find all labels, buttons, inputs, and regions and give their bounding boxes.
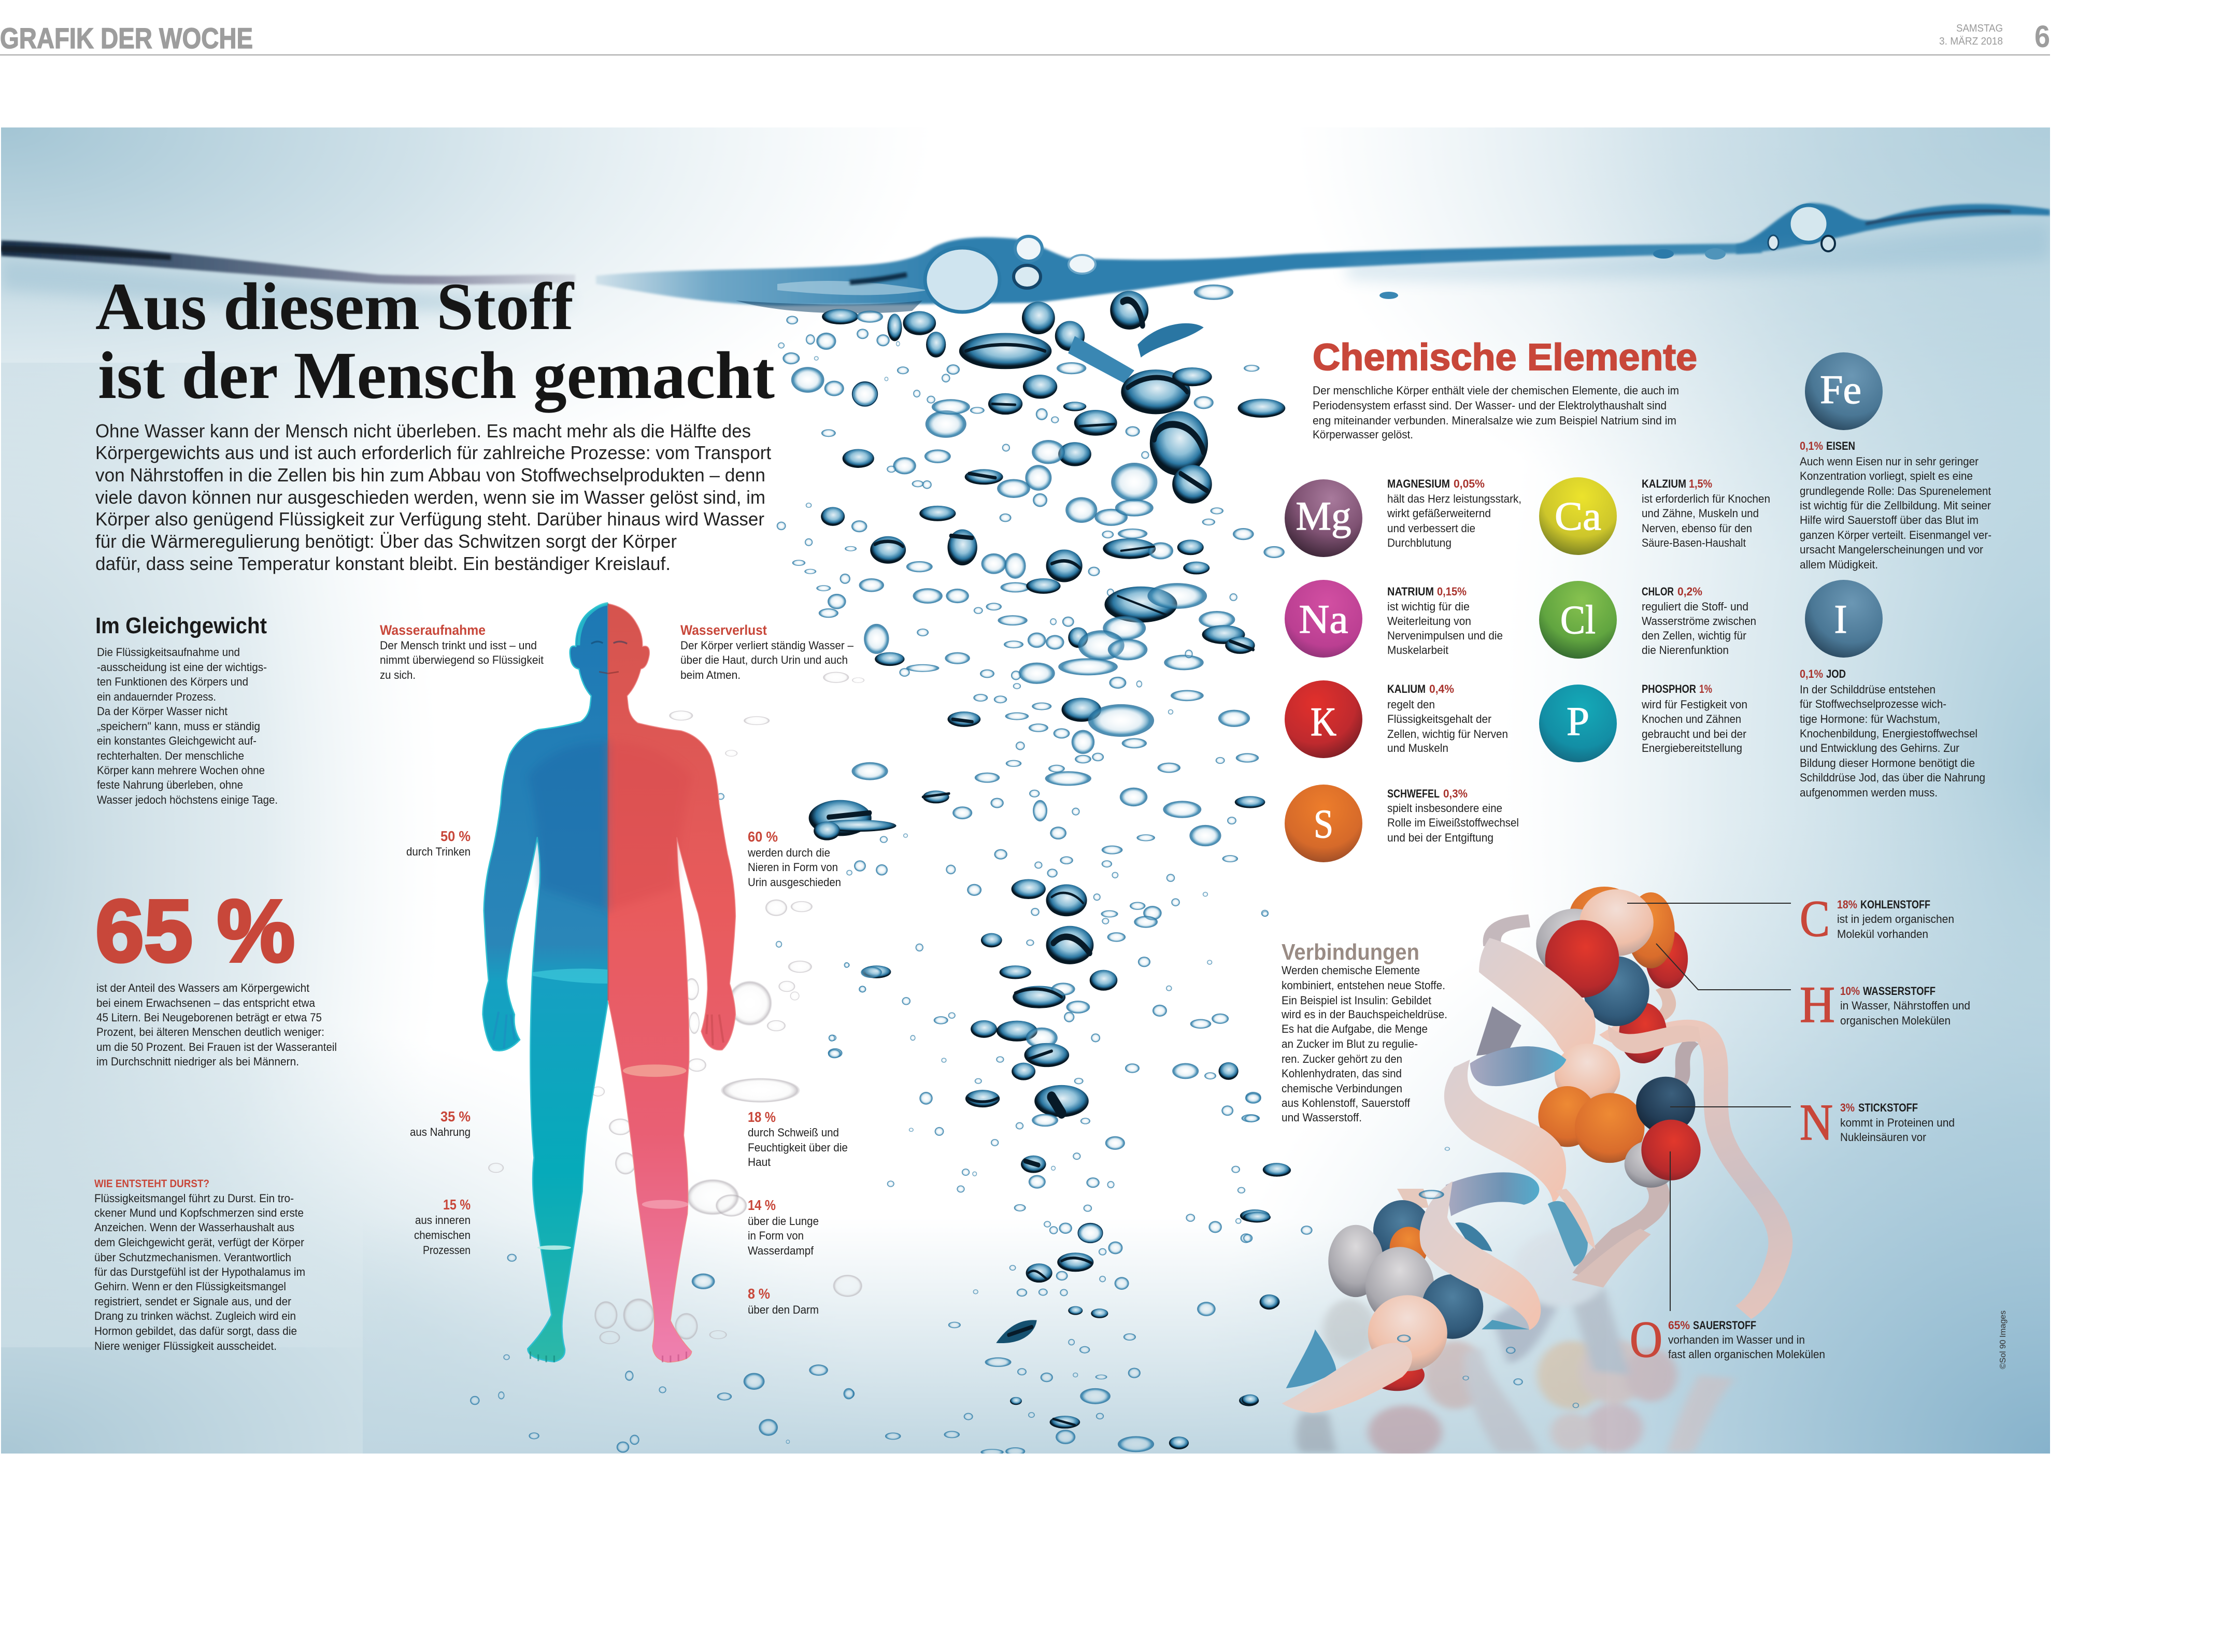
18 percent: Haut (748, 1156, 771, 1169)
element: jod: JOD (1826, 667, 1846, 680)
element: chlor (1539, 581, 1756, 659)
panel: 65 percent (95, 882, 337, 1068)
element: schwefel: SCHWEFEL (1387, 787, 1440, 800)
intro text: viele davon können nur ausgeschieden werden, wenn sie im Wasser gelöst sind, im (95, 487, 765, 508)
intro text: von Nährstoffen in die Zellen bis hin zum Abbau von Stoffwechselprodukten – denn (95, 464, 765, 486)
8 percent: 8 % (748, 1286, 770, 1302)
atom label: O: SAUERSTOFF (1693, 1319, 1756, 1332)
element: kalium: regelt den (1387, 698, 1435, 711)
element: jod: und Entwicklung des Gehirns. Zur (1800, 742, 1959, 754)
page number: 6 (2034, 19, 2050, 54)
element: natrium: Muskelarbeit (1387, 644, 1448, 657)
panel: Wie entsteht Durst (94, 1178, 305, 1352)
helix blue inner surface (1470, 1046, 1566, 1086)
panel: Wasseraufnahme (380, 622, 544, 681)
body text: registriert, sendet er Signale aus, und der (94, 1295, 291, 1308)
body shading (493, 604, 723, 1362)
page header (0, 19, 2050, 55)
body text (1281, 964, 1447, 1124)
element: magnesium: wirkt gefäßerweiternd (1387, 507, 1491, 520)
body text: aus Kohlenstoff, Sauerstoff (1282, 1096, 1411, 1109)
element: kalzium: und Zähne, Muskeln und (1642, 507, 1759, 520)
element: kalium: und Muskeln (1387, 742, 1448, 754)
title: Aus diesem Stoff (95, 269, 575, 344)
icon: P sphere: P (1567, 699, 1589, 744)
atom label: N: STICKSTOFF (1858, 1101, 1918, 1114)
panel: Wasseraufnahme: nimmt überwiegend so Flüssigkeit (380, 653, 544, 666)
intro text: Körpergewichts aus und ist auch erforderlich für zahlreiche Prozesse: vom Transport (95, 442, 771, 463)
element: natrium: ist wichtig für die (1387, 600, 1470, 613)
description: im Durchschnitt niedriger als bei Männern. (96, 1055, 299, 1068)
human body figure (483, 604, 735, 1362)
atom label: N: 3% (1840, 1101, 1855, 1114)
15 percent: chemischen (414, 1229, 471, 1242)
body text: ten Funktionen des Körpers und (97, 675, 248, 688)
body text: Niere weniger Flüssigkeit ausscheidet. (94, 1340, 277, 1352)
icon: Na sphere: Na (1299, 596, 1348, 642)
atom label: C: KOHLENSTOFF (1860, 898, 1930, 911)
body text: feste Nahrung überleben, ohne (97, 778, 243, 791)
element: jod: aufgenommen werden muss. (1800, 786, 1938, 799)
element: magnesium (1285, 477, 1521, 557)
60 percent: Nieren in Form von (748, 861, 838, 874)
header date: 3. MÄRZ 2018 (1939, 36, 2003, 47)
atom label: H: organischen Molekülen (1840, 1014, 1951, 1027)
element: eisen: EISEN (1826, 439, 1855, 452)
35 percent: aus Nahrung (410, 1126, 471, 1138)
intake labels (406, 828, 471, 1257)
element: jod: tige Hormone: für Wachstum, (1800, 713, 1940, 725)
icon: S sphere (1285, 785, 1362, 862)
14 percent: über die Lunge (748, 1215, 819, 1228)
element: phosphor: 1% (1699, 682, 1712, 695)
panel: Chemische Elemente heading (1313, 337, 1697, 441)
heading: WIE ENTSTEHT DURST? (94, 1178, 209, 1190)
14 percent: Wasserdampf (748, 1244, 814, 1257)
element: eisen: allem Müdigkeit. (1800, 558, 1878, 571)
atom label: O: vorhanden im Wasser und in (1668, 1333, 1805, 1346)
icon: K sphere (1285, 680, 1362, 758)
atom label: H: H (1800, 976, 1835, 1033)
element: natrium: 0,15% (1437, 585, 1467, 598)
element: jod: Knochenbildung, Energiestoffwechsel (1800, 727, 1977, 740)
small bubbles over protein (1242, 910, 1579, 1408)
element: kalium: Flüssigkeitsgehalt der (1387, 713, 1491, 725)
element: kalzium: Nerven, ebenso für den (1642, 522, 1752, 535)
blue half: water intake (483, 604, 608, 1362)
60 percent: Urin ausgeschieden (748, 876, 841, 889)
element: kalium: KALIUM (1387, 682, 1426, 695)
body text: kombiniert, entstehen neue Stoffe. (1282, 979, 1445, 992)
element: eisen: grundlegende Rolle: Das Spurenelement (1800, 485, 1991, 497)
element: phosphor: Energiebereitstellung (1642, 742, 1742, 754)
body text: rechterhalten. Der menschliche (97, 749, 244, 762)
intro: Körperwasser gelöst. (1313, 428, 1413, 441)
body text: Kohlenhydraten, das sind (1282, 1067, 1402, 1080)
body text (97, 646, 278, 806)
icon: Ca sphere (1539, 477, 1617, 555)
big number: 65 % (95, 882, 295, 980)
atom label: C: Molekül vorhanden (1837, 928, 1928, 941)
element: phosphor (1539, 682, 1747, 762)
element: phosphor: gebraucht und bei der (1642, 728, 1746, 740)
upper helix back band (1476, 1006, 1521, 1056)
atom label: N: Nukleinsäuren vor (1840, 1131, 1926, 1144)
panel: Wasseraufnahme: zu sich. (380, 668, 416, 681)
body text: wird es in der Bauchspeicheldrüse. (1281, 1008, 1447, 1021)
body text: Ein Beispiel ist Insulin: Gebildet (1282, 994, 1431, 1007)
water surface (1, 203, 2050, 314)
body text: Anzeichen. Wenn der Wasserhaushalt aus (94, 1221, 294, 1234)
body text: -ausscheidung ist eine der wichtigs- (97, 661, 267, 674)
atom label: O (1630, 1311, 1825, 1368)
panel: Verbindungen (1281, 939, 1447, 1124)
element: phosphor: wird für Festigkeit von (1641, 698, 1747, 711)
body text: Körper kann mehrere Wochen ohne (97, 764, 265, 777)
element: phosphor: PHOSPHOR (1642, 682, 1696, 695)
heading: Im Gleichgewicht (95, 613, 267, 638)
body text (94, 1192, 305, 1352)
15 percent: aus inneren (415, 1214, 471, 1227)
body text: an Zucker im Blut zu regulie- (1282, 1037, 1418, 1050)
element: eisen: Hilfe wird Sauerstoff über das Blut im (1800, 514, 1979, 526)
atom label: N: N (1800, 1093, 1833, 1151)
atom label: N: kommt in Proteinen und (1840, 1116, 1955, 1129)
intro: Periodensystem erfasst sind. Der Wasser- und der Elektrolythaushalt sind (1313, 399, 1667, 412)
panel: Wasserverlust: Der Körper verliert ständig Wasser – (680, 639, 853, 652)
element: natrium: Nervenimpulsen und die (1387, 629, 1503, 642)
intro text: Körper also genügend Flüssigkeit zur Verfügung steht. Darüber hinaus wird Wasser (95, 508, 764, 530)
body text: Wasser jedoch höchstens einige Tage. (97, 793, 278, 806)
18 percent: durch Schweiß und (748, 1126, 839, 1139)
panel: Wasserverlust: Wasserverlust (680, 622, 767, 638)
icon: Fe sphere: Fe (1820, 367, 1861, 412)
element: eisen: Auch wenn Eisen nur in sehr geringer (1800, 455, 1979, 468)
atom label: H: in Wasser, Nährstoffen und (1840, 999, 1970, 1012)
element: chlor: den Zellen, wichtig für (1642, 629, 1746, 642)
element: chlor: CHLOR (1642, 585, 1674, 598)
intro text (95, 420, 771, 574)
panel: Wasseraufnahme: Der Mensch trinkt und isst – und (380, 639, 537, 652)
atom label: O: fast allen organischen Molekülen (1668, 1348, 1825, 1361)
14 percent: 14 % (748, 1197, 776, 1213)
atom label: H: 10% (1840, 985, 1860, 998)
lower atoms (1328, 1200, 1483, 1391)
icon: Mg sphere (1285, 479, 1362, 557)
body text: Drang zu trinken wächst. Zugleich wird ein (94, 1309, 296, 1322)
header day: SAMSTAG (1956, 23, 2003, 34)
60 percent (747, 829, 841, 889)
element: eisen: ist wichtig für die Zellbildung. Mit seiner (1800, 499, 1991, 512)
body text: Flüssigkeitsmangel führt zu Durst. Ein tro- (94, 1192, 294, 1205)
element: kalzium: Säure-Basen-Haushalt (1642, 536, 1746, 549)
body text: Da der Körper Wasser nicht (97, 705, 228, 718)
body text: und Wasserstoff. (1282, 1111, 1362, 1124)
body text: Gehirn. Wenn er den Flüssigkeitsmangel (94, 1280, 286, 1293)
icon: P sphere (1539, 685, 1617, 762)
60 percent: 60 % (748, 829, 778, 845)
body text: ckener Mund und Kopfschmerzen sind erste (94, 1206, 304, 1219)
element: schwefel: und bei der Entgiftung (1387, 831, 1493, 844)
body text: ein andauernder Prozess. (97, 690, 216, 703)
element: schwefel: Rolle im Eiweißstoffwechsel (1387, 816, 1519, 829)
35 percent (410, 1108, 471, 1138)
loss labels (747, 829, 848, 1316)
header title: GRAFIK DER WOCHE (0, 22, 253, 54)
element: kalium (1285, 680, 1508, 758)
panel: background image (1, 127, 2050, 1459)
lower helix (1446, 1172, 1539, 1216)
element: kalium: 0,4% (1429, 682, 1454, 695)
heading: Verbindungen (1282, 939, 1419, 965)
element: natrium: NATRIUM (1387, 585, 1434, 598)
leader lines (1627, 903, 1791, 1311)
atom label: H (1800, 976, 1970, 1033)
panel: Wasserverlust: über die Haut, durch Urin und auch (680, 653, 848, 666)
element: schwefel: spielt insbesondere eine (1387, 802, 1502, 815)
description: Prozent, bei älteren Menschen deutlich weniger: (96, 1026, 324, 1038)
icon: Mg sphere: Mg (1296, 493, 1351, 538)
helix front band A (1479, 938, 1596, 1071)
50 percent (406, 828, 471, 858)
intro (1313, 384, 1679, 441)
bubbles: lower cluster (786, 846, 1291, 1455)
element: phosphor: Knochen und Zähnen (1642, 713, 1741, 725)
body text: über Schutzmechanismen. Verantwortlich (94, 1251, 291, 1264)
element: chlor: die Nierenfunktion (1642, 644, 1729, 657)
35 percent: 35 % (440, 1108, 471, 1124)
middle atoms (1538, 1077, 1701, 1188)
body text: Hormon gebildet, das dafür sorgt, dass die (94, 1325, 297, 1337)
element: magnesium: 0,05% (1454, 477, 1485, 490)
body text: Die Flüssigkeitsaufnahme und (97, 646, 240, 659)
description (96, 981, 337, 1068)
element: schwefel (1285, 785, 1519, 862)
element: kalzium: 1,5% (1689, 477, 1712, 490)
60 percent: werden durch die (747, 846, 830, 859)
body text: ein konstantes Gleichgewicht auf- (97, 734, 257, 747)
element: eisen: Konzentration vorliegt, spielt es eine (1800, 469, 1973, 482)
body text: „speichern" kann, muss er ständig (97, 720, 260, 733)
element: kalzium: KALZIUM (1642, 477, 1686, 490)
tail strand (1609, 1029, 1781, 1312)
element: magnesium: hält das Herz leistungsstark, (1387, 492, 1521, 505)
body text: für das Durstgefühl ist der Hypothalamus im (94, 1265, 305, 1278)
element: chlor: reguliert die Stoff- und (1642, 600, 1748, 613)
15 percent (414, 1197, 471, 1257)
icon: K sphere: K (1311, 699, 1336, 744)
atom label: N (1800, 1093, 1955, 1151)
panel: Wasseraufnahme: Wasseraufnahme (380, 622, 486, 638)
atom label: O: O (1630, 1311, 1662, 1368)
14 percent (748, 1197, 819, 1257)
icon: S sphere: S (1314, 801, 1333, 846)
50 percent: 50 % (440, 828, 471, 844)
element: kalzium (1539, 477, 1770, 555)
atom label: C: ist in jedem organischen (1837, 913, 1954, 925)
element: jod: 0,1% (1800, 667, 1823, 680)
top atom cluster: back spheres (1536, 887, 1688, 1063)
body text: dem Gleichgewicht gerät, verfügt der Körper (94, 1236, 304, 1249)
icon: Ca sphere: Ca (1555, 493, 1601, 538)
element: kalzium: ist erforderlich für Knochen (1642, 492, 1770, 505)
icon: I sphere: I (1834, 596, 1847, 642)
red half: water loss (608, 604, 735, 1362)
atom label: H: WASSERSTOFF (1863, 985, 1936, 998)
8 percent: über den Darm (748, 1303, 819, 1316)
title: ist der Mensch gemacht (98, 338, 775, 413)
element: jod: Bildung dieser Hormone benötigt die (1800, 757, 1975, 770)
intro text: Ohne Wasser kann der Mensch nicht überleben. Es macht mehr als die Hälfte des (95, 420, 751, 442)
14 percent: in Form von (748, 1229, 804, 1242)
ghost bubbles around the body (470, 672, 882, 1452)
element: eisen: 0,1% (1800, 439, 1823, 452)
title (95, 269, 775, 413)
element: jod: In der Schilddrüse entstehen (1800, 683, 1936, 696)
element: eisen: ursacht Mangelerscheinungen und vor (1800, 543, 1983, 556)
intro: Der menschliche Körper enthält viele der chemischen Elemente, die auch im (1313, 384, 1679, 397)
element: magnesium: MAGNESIUM (1387, 477, 1450, 490)
18 percent: 18 % (748, 1109, 776, 1125)
body text: chemische Verbindungen (1282, 1082, 1402, 1095)
helix band C (1444, 1060, 1566, 1204)
element: eisen (1800, 352, 1991, 571)
element: kalium: Zellen, wichtig für Nerven (1387, 728, 1508, 740)
intro text: dafür, dass seine Temperatur konstant bleibt. Ein beständiger Kreislauf. (95, 553, 671, 574)
atom label: C (1800, 890, 1954, 947)
element: jod (1800, 580, 1985, 799)
element: jod: für Stoffwechselprozesse wich- (1800, 697, 1946, 710)
element: natrium (1285, 580, 1503, 658)
icon: Cl sphere (1539, 581, 1617, 659)
atom label: O: 65% (1668, 1319, 1690, 1332)
atom label: C: 18% (1837, 898, 1857, 911)
element: magnesium: und verbessert die (1387, 522, 1475, 535)
18 percent: Feuchtigkeit über die (748, 1141, 848, 1154)
15 percent: Prozessen (423, 1244, 471, 1257)
panel: Im Gleichgewicht (95, 613, 278, 806)
body text: Werden chemische Elemente (1282, 964, 1420, 977)
icon: Cl sphere: Cl (1560, 597, 1596, 642)
8 percent (748, 1286, 819, 1316)
element: schwefel: 0,3% (1443, 787, 1468, 800)
photo credit: ©Sol 90 Images (1999, 1311, 2008, 1369)
element: natrium: Weiterleitung von (1387, 615, 1471, 628)
intro: eng miteinander verbunden. Mineralsalze wie zum Beispiel Natrium sind im (1313, 414, 1676, 427)
body text: Es hat die Aufgabe, die Menge (1282, 1022, 1428, 1035)
heading: Chemische Elemente (1313, 337, 1697, 378)
element: magnesium: Durchblutung (1387, 536, 1452, 549)
intro text: für die Wärmeregulierung benötigt: Über das Schwitzen sorgt der Körper (95, 531, 677, 552)
element: chlor: Wasserströme zwischen (1642, 615, 1756, 628)
element: chlor: 0,2% (1677, 585, 1702, 598)
15 percent: 15 % (443, 1197, 471, 1213)
50 percent: durch Trinken (406, 845, 471, 858)
body text: ren. Zucker gehört zu den (1282, 1052, 1402, 1065)
icon: Na sphere (1285, 580, 1362, 658)
description: ist der Anteil des Wassers am Körpergewicht (96, 981, 310, 994)
faded reflection at the bottom (1296, 1231, 1735, 1459)
element: eisen: ganzen Körper verteilt. Eisenmangel ver- (1800, 529, 1991, 542)
atom label: C: C (1800, 890, 1830, 947)
bubbles: upper cluster (777, 284, 1285, 846)
panel: Wasserverlust: beim Atmen. (680, 668, 741, 681)
description: um die 50 Prozent. Bei Frauen ist der Wasseranteil (96, 1041, 337, 1053)
panel: Wasserverlust (680, 622, 853, 681)
insulin protein model (1282, 887, 1781, 1459)
description: bei einem Erwachsenen – das entspricht etwa (96, 996, 315, 1009)
description: 45 Litern. Bei Neugeborenen beträgt er etwa 75 (96, 1011, 322, 1024)
18 percent (748, 1109, 848, 1169)
element: jod: Schilddrüse Jod, das über die Nahrung (1800, 771, 1985, 784)
icon: Fe sphere (1805, 352, 1883, 430)
icon: I sphere (1805, 580, 1883, 658)
helix band E (1420, 1181, 1541, 1330)
